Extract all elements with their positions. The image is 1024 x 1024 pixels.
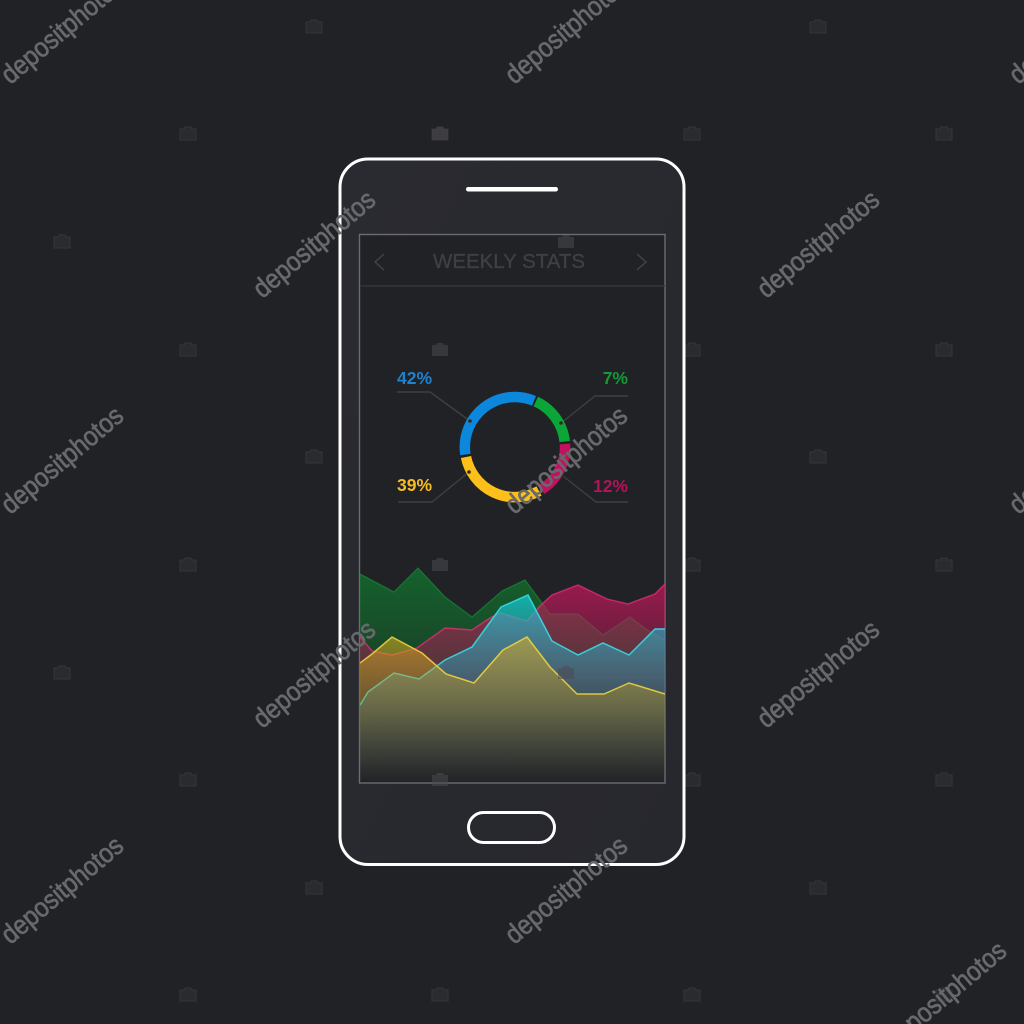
label: 7%: 7% bbox=[603, 368, 628, 388]
area chart bbox=[360, 568, 665, 783]
area: magenta bbox=[360, 584, 665, 758]
leader lines bbox=[397, 392, 628, 502]
label: 42%: 42% bbox=[397, 368, 432, 388]
segment: green 7% bbox=[536, 402, 565, 442]
watermark: camera icons on phone bbox=[432, 127, 574, 786]
phone body outline bbox=[340, 159, 684, 864]
area: blue bbox=[360, 595, 665, 763]
leader dots bbox=[467, 419, 565, 478]
phone screen bbox=[360, 234, 665, 783]
area: yellow bbox=[360, 638, 665, 766]
watermark: text: depositphotos bbox=[247, 614, 381, 734]
watermark: text: depositphotos bbox=[751, 184, 885, 304]
icon: left arrow bbox=[375, 254, 384, 270]
donut chart bbox=[397, 368, 628, 502]
icon: right arrow bbox=[637, 254, 646, 270]
phone home button bbox=[468, 812, 554, 842]
label: 12%: 12% bbox=[593, 476, 628, 496]
screen header bbox=[360, 251, 665, 286]
label: 39%: 39% bbox=[397, 475, 432, 495]
title: WEEKLY STATS bbox=[433, 251, 585, 273]
watermark: text: depositphotos bbox=[247, 184, 381, 304]
watermark: text: depositphotos bbox=[499, 400, 633, 520]
area: green bbox=[360, 568, 665, 734]
phone speaker bbox=[466, 187, 558, 192]
segment: magenta 12% bbox=[542, 444, 565, 490]
watermark: text: depositphotos bbox=[751, 614, 885, 734]
watermark: text: depositphotos bbox=[499, 830, 633, 950]
segment: blue 42% bbox=[465, 397, 534, 454]
segment: yellow 39% bbox=[466, 457, 539, 497]
